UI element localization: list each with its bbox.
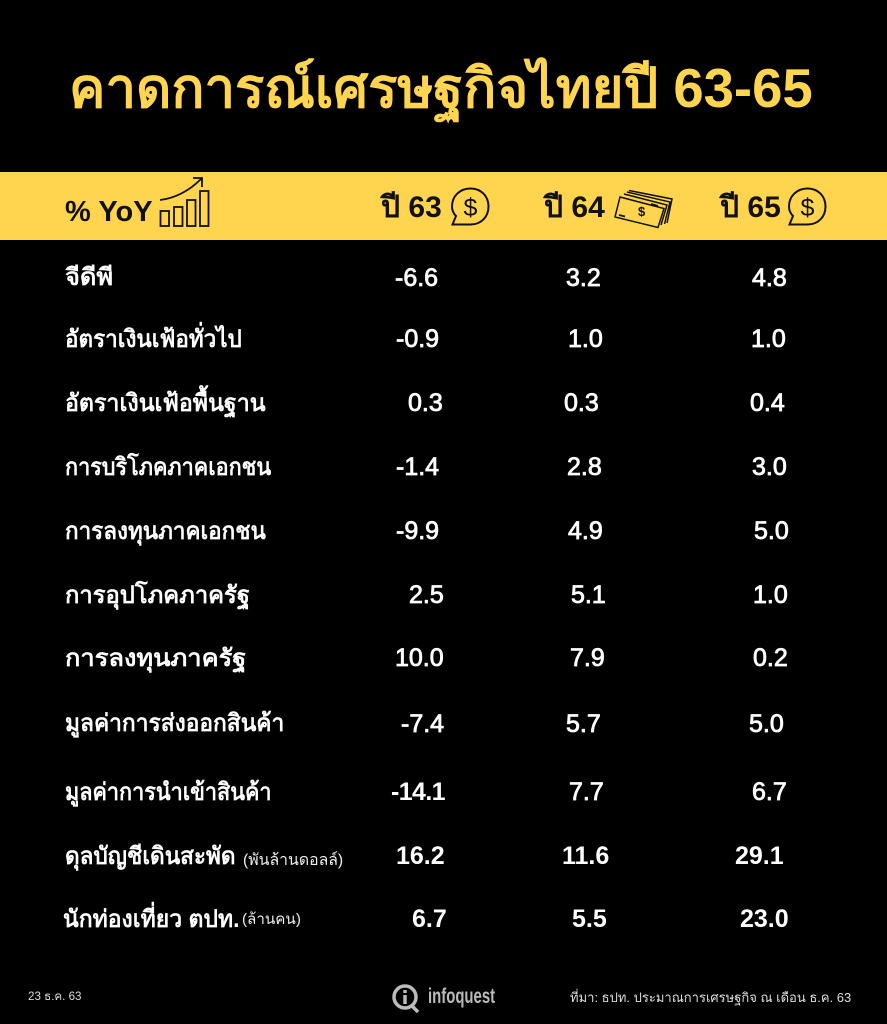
- text: -9.9: [396, 517, 439, 545]
- text: -1.4: [396, 453, 439, 481]
- text: 4.8: [752, 264, 787, 292]
- text: -0.9: [396, 325, 439, 353]
- header: % YoY: % YoY: [65, 196, 153, 228]
- header: year 63: ปี 63: [381, 191, 442, 224]
- text: 5.1: [571, 581, 606, 609]
- text: (ล้านคน): [242, 911, 301, 928]
- text: 6.7: [752, 778, 787, 806]
- icon: magnifier i: [392, 984, 420, 1013]
- icon: dollar speech bubble 63: [451, 188, 490, 226]
- text: 7.7: [569, 778, 604, 806]
- row: public consumption: การอุปโภคภาครัฐ: [65, 582, 250, 609]
- icon: dollar speech bubble 65: [788, 188, 826, 226]
- text: 5.0: [749, 710, 784, 738]
- text: 1.0: [568, 325, 603, 353]
- text: 3.0: [752, 453, 787, 481]
- logo: infoquest: [392, 984, 495, 1013]
- text: 0.3: [408, 389, 443, 417]
- row: private consumption: การบริโภคภาคเอกชน: [65, 454, 271, 481]
- icon: banknotes: $: [638, 204, 646, 219]
- text: 10.0: [395, 644, 444, 672]
- date: 23 ธ.ค. 63: [28, 990, 82, 1003]
- text: 0.3: [564, 389, 599, 417]
- text: 7.9: [570, 644, 605, 672]
- row: headline inflation: อัตราเงินเฟ้อทั่วไป: [65, 326, 242, 353]
- text: 5.5: [572, 905, 607, 933]
- text: 23.0: [740, 905, 789, 933]
- text: 2.5: [409, 581, 444, 609]
- row: imports: มูลค่าการนำเข้าสินค้า: [65, 779, 272, 806]
- text: 3.2: [566, 264, 601, 292]
- row: GDP: จีดีพี: [65, 264, 113, 291]
- icon: banknotes: [614, 190, 673, 228]
- text: 29.1: [735, 842, 784, 870]
- text: 11.6: [562, 842, 609, 870]
- text: 0.4: [750, 389, 785, 417]
- icon: dollar speech bubble 63: $: [464, 194, 478, 222]
- title: คาดการณ์เศรษฐกิจไทยปี 63-65: [69, 58, 813, 119]
- row: public investment: การลงทุนภาครัฐ: [65, 645, 246, 672]
- icon: dollar speech bubble 65: $: [801, 194, 815, 222]
- icon: rising bar chart: [160, 177, 210, 227]
- text: 1.0: [753, 581, 788, 609]
- row: foreign tourists: นักท่องเที่ยว ตปท.: [63, 906, 240, 933]
- text: 5.0: [754, 517, 789, 545]
- text: 2.8: [567, 453, 602, 481]
- wordmark: infoquest: [428, 985, 495, 1008]
- text: 16.2: [396, 842, 445, 870]
- text: 1.0: [751, 325, 786, 353]
- header: year 65: ปี 65: [720, 191, 781, 224]
- text: -6.6: [395, 264, 438, 292]
- text: -7.4: [401, 710, 444, 738]
- source note: ที่มา: ธปท. ประมาณการเศรษฐกิจ ณ เดือน ธ.ค. 63: [570, 990, 851, 1005]
- text: (พันล้านดอลล์): [243, 852, 343, 869]
- header band: [0, 172, 887, 240]
- header: year 64: ปี 64: [544, 191, 605, 224]
- text: 4.9: [568, 517, 603, 545]
- row: exports: มูลค่าการส่งออกสินค้า: [65, 710, 284, 737]
- text: 6.7: [412, 905, 447, 933]
- row: core inflation: อัตราเงินเฟ้อพื้นฐาน: [65, 390, 266, 417]
- text: 5.7: [566, 710, 601, 738]
- row: current account: ดุลบัญชีเดินสะพัด: [65, 843, 236, 870]
- text: -14.1: [391, 778, 445, 806]
- row: private investment: การลงทุนภาคเอกชน: [65, 518, 266, 545]
- text: 0.2: [753, 644, 788, 672]
